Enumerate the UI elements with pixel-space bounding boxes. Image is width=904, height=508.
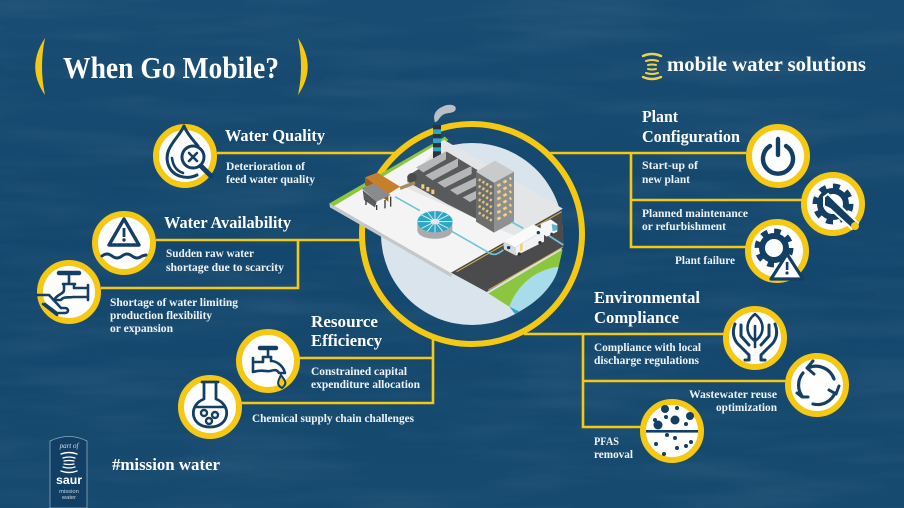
panel: water availability: production flexibility xyxy=(110,310,212,322)
badge: part of saur mission water: water xyxy=(61,495,76,501)
panel: water quality: Deterioration of xyxy=(226,161,305,173)
pipes xyxy=(395,197,563,254)
panel: environmental compliance: Wastewater reuse xyxy=(689,389,777,401)
panel: plant configuration xyxy=(642,107,748,267)
hashtag: #mission water xyxy=(112,455,220,474)
ring and pale disc xyxy=(362,124,582,344)
panel: water quality: Water Quality xyxy=(225,126,325,145)
badge: part of saur mission water: mission xyxy=(59,489,79,495)
panel: water availability: Sudden raw water xyxy=(166,248,254,260)
icon: recycle arrows xyxy=(788,356,846,414)
icon: dripping tap xyxy=(239,332,297,390)
isometric plant scene xyxy=(329,105,564,314)
office tower xyxy=(476,161,514,233)
panel: plant configuration: Start-up of xyxy=(642,160,698,172)
panel: environmental compliance: removal xyxy=(594,449,633,461)
badge: part of saur mission water: saur xyxy=(56,475,83,487)
mobile water truck xyxy=(503,219,557,256)
panel: plant configuration: Planned maintenance xyxy=(642,208,748,220)
panel: resource efficiency: Constrained capital xyxy=(311,366,407,378)
title with brackets xyxy=(35,38,308,95)
panel: water quality: feed water quality xyxy=(226,174,315,186)
panel: water availability: Water Availability xyxy=(164,213,291,232)
panel: resource efficiency: Efficiency xyxy=(311,331,382,350)
panel: resource efficiency xyxy=(252,312,421,425)
panel: plant configuration: Plant xyxy=(642,107,678,126)
icon: gear with warning xyxy=(748,222,806,280)
icon: power button xyxy=(749,127,807,185)
panel: resource efficiency: Chemical supply chain challenges xyxy=(252,413,414,425)
icon: flask xyxy=(181,378,239,436)
central illustration: treatment plant in a ring xyxy=(329,105,582,344)
panel: plant configuration: Configuration xyxy=(642,127,741,146)
grass and water bank xyxy=(488,249,563,314)
clarifier tank xyxy=(417,211,453,239)
panel: environmental compliance: Compliance xyxy=(594,308,679,327)
badge: part of saur mission water: part of xyxy=(59,442,79,450)
panel: water availability: Shortage of water limiting xyxy=(110,297,238,309)
icon: tap over hand xyxy=(37,263,98,321)
panel: plant configuration: new plant xyxy=(642,174,690,186)
logo: mobile water solutions: mobile water solutions xyxy=(667,52,866,76)
panel: water availability: shortage due to scarcity xyxy=(166,262,284,274)
panel: environmental compliance: Environmental xyxy=(594,288,700,307)
panel: resource efficiency: expenditure allocation xyxy=(311,379,421,391)
icon: PFAS filter membrane xyxy=(643,402,701,460)
panel: water availability: or expansion xyxy=(110,323,174,335)
panel: water availability xyxy=(110,213,291,335)
connector lines xyxy=(101,153,802,427)
icon: warning with waves xyxy=(95,214,153,272)
icon: hands holding leaf xyxy=(726,309,784,367)
chimney and smoke xyxy=(433,105,456,158)
road xyxy=(451,209,564,292)
icon: gear with wrench xyxy=(804,175,862,233)
panel: plant configuration: Plant failure xyxy=(675,255,735,267)
panel: environmental compliance: PFAS xyxy=(594,436,619,448)
panel: environmental compliance xyxy=(594,288,778,461)
icon: water drop with magnifier xyxy=(156,126,214,185)
panel: plant configuration: or refurbishment xyxy=(642,221,726,233)
panel: environmental compliance: Compliance with local xyxy=(594,342,701,354)
panel: resource efficiency: Resource xyxy=(311,312,378,331)
filtration unit xyxy=(362,173,415,210)
factory hall xyxy=(407,151,477,219)
title with brackets: When Go Mobile? xyxy=(63,50,279,85)
panel: environmental compliance: discharge regulations xyxy=(594,355,700,367)
panel: water quality xyxy=(225,126,325,186)
badge: part of saur mission water xyxy=(50,436,87,508)
panel: environmental compliance: optimization xyxy=(716,402,778,414)
